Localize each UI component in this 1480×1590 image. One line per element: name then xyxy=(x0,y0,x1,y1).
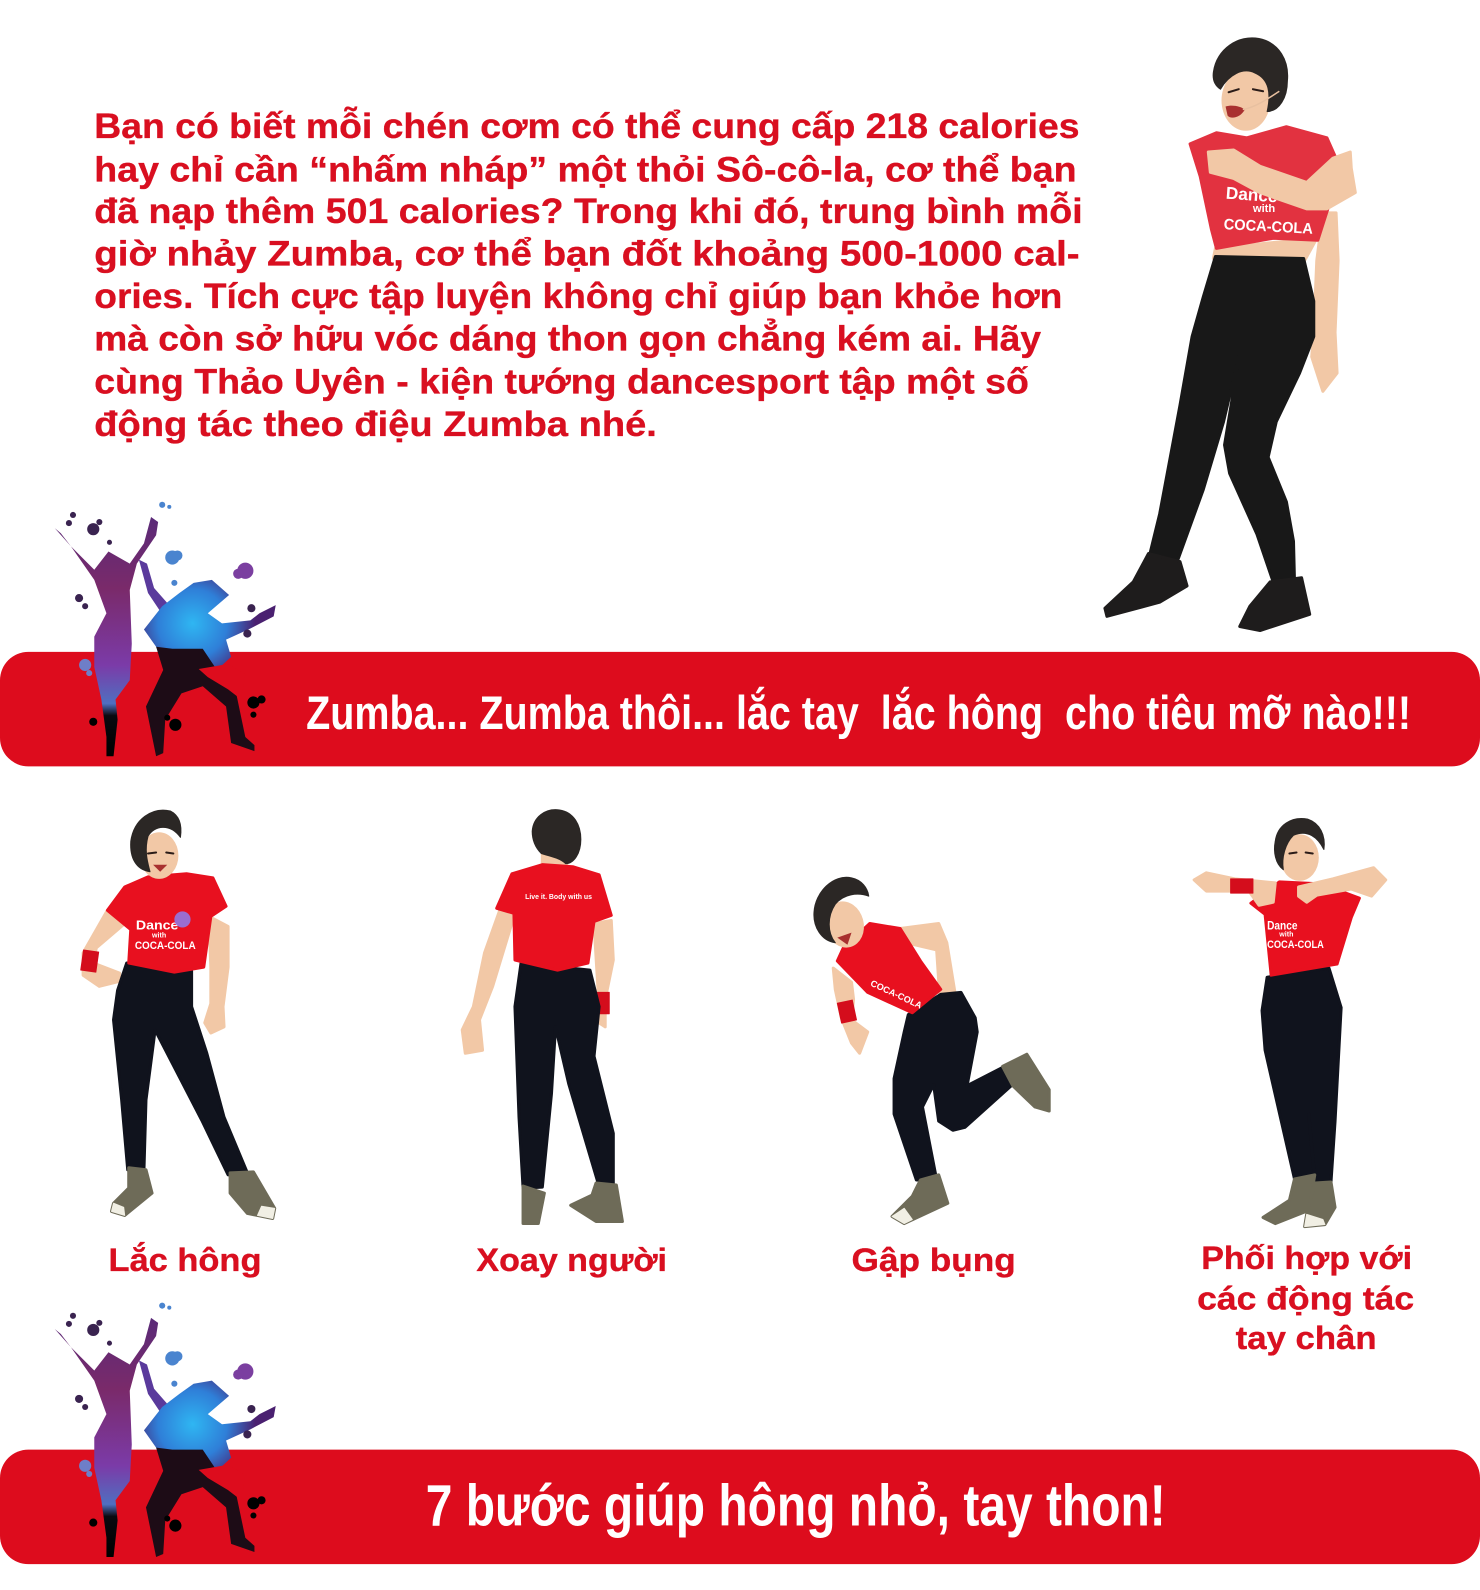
figure: hip shake: with xyxy=(151,932,166,940)
intro paragraph: đã nạp thêm 501 calories? Trong khi đó, trung bình mỗi xyxy=(94,191,1083,231)
figure: combined arm and leg moves: with xyxy=(1278,931,1293,939)
label: combined moves: Phối hợp với xyxy=(1201,1240,1412,1276)
intro paragraph: cùng Thảo Uyên - kiện tướng dancesport tập một số xyxy=(94,361,1029,401)
hero figure: dancer in crop top: with xyxy=(1252,203,1275,215)
figure: body twist from behind: Live it. Body with us xyxy=(525,893,592,901)
hero figure: dancer in crop top: Dance xyxy=(1225,183,1278,206)
intro paragraph: hay chỉ cần “nhấm nháp” một thỏi Sô-cô-la, cơ thể bạn xyxy=(94,149,1077,189)
intro paragraph: mà còn sở hữu vóc dáng thon gọn chẳng kém ai. Hãy xyxy=(94,319,1041,359)
figure: hip shake: COCA-COLA xyxy=(135,940,196,952)
dancers silhouette icon, bottom xyxy=(55,1303,276,1557)
intro paragraph: động tác theo điệu Zumba nhé. xyxy=(94,404,657,444)
intro paragraph xyxy=(94,106,1083,444)
hero figure: dancer in crop top xyxy=(1105,38,1355,631)
label: hip shake: Lắc hông xyxy=(108,1241,262,1278)
label: combined moves: các động tác xyxy=(1197,1281,1414,1317)
label: combined moves xyxy=(1197,1240,1414,1356)
figure: body twist from behind xyxy=(462,810,622,1224)
intro paragraph: giờ nhảy Zumba, cơ thể bạn đốt khoảng 500-1000 cal- xyxy=(94,234,1080,274)
intro paragraph: ories. Tích cực tập luyện không chỉ giúp bạn khỏe hơn xyxy=(94,276,1062,316)
label: body twist: Xoay người xyxy=(476,1242,667,1278)
hero figure: dancer in crop top: COCA-COLA xyxy=(1223,216,1313,238)
intro paragraph: Bạn có biết mỗi chén cơm có thể cung cấp 218 calories xyxy=(94,106,1080,146)
label: crunch: Gập bụng xyxy=(852,1242,1016,1278)
figure: combined arm and leg moves xyxy=(1194,818,1386,1227)
figure: hip shake xyxy=(81,810,275,1218)
label: combined moves: tay chân xyxy=(1236,1320,1377,1356)
figure: crunch: COCA-COLA xyxy=(869,978,924,1011)
figure: crunch xyxy=(814,877,1049,1224)
banner: seven steps: 7 bước giúp hông nhỏ, tay thon! xyxy=(426,1474,1166,1539)
banner: zumba slogan xyxy=(0,652,1480,766)
figure: hip shake: Dance xyxy=(136,918,178,933)
figure: combined arm and leg moves: COCA-COLA xyxy=(1267,939,1324,951)
dancers silhouette icon, top xyxy=(55,502,276,756)
figure: combined arm and leg moves: Dance xyxy=(1267,919,1298,933)
banner: seven steps xyxy=(0,1450,1480,1564)
